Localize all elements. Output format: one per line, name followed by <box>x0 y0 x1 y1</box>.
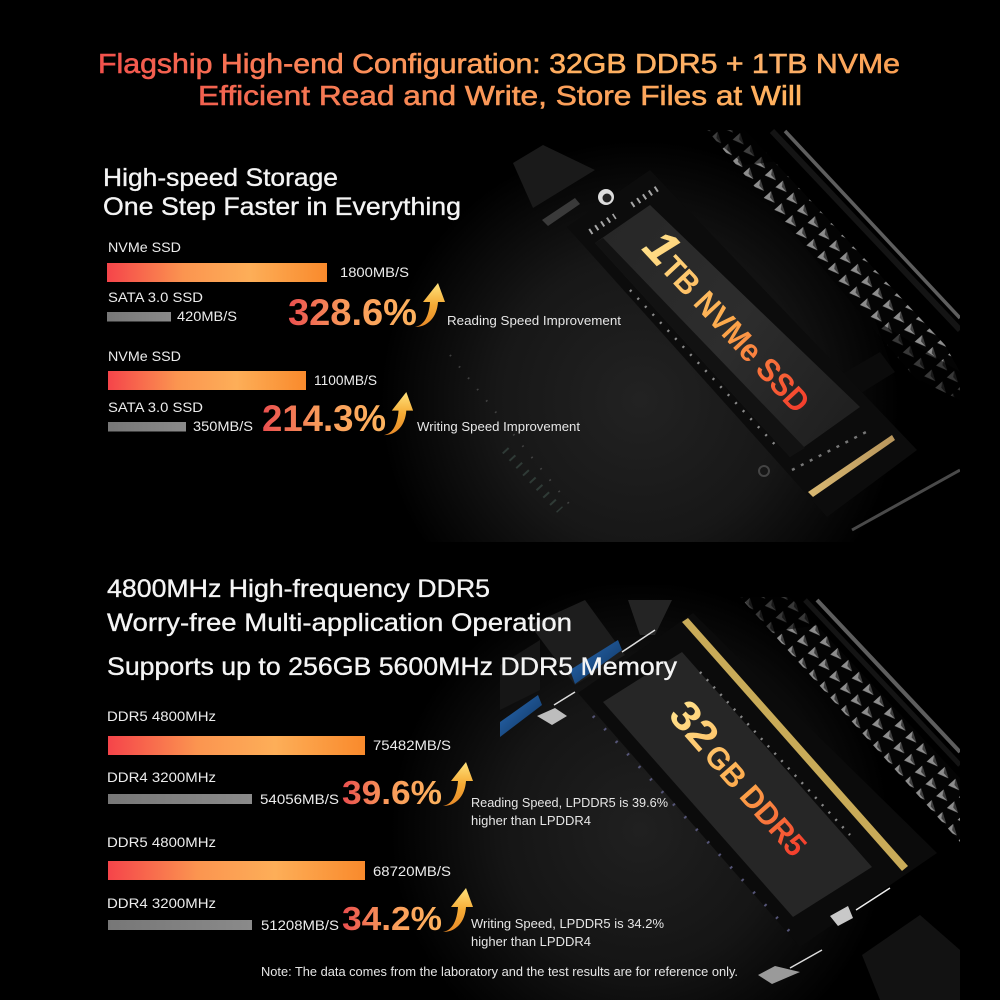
heading: DDR5 memory: 4800MHz High-frequency DDR5 <box>107 575 490 603</box>
photo: DDR5 memory module in chassis <box>434 597 960 1000</box>
heading: DDR5 memory: Worry-free Multi-application Operation <box>107 609 572 637</box>
heading: DDR5 memory <box>107 575 678 681</box>
chart: SSD reading speed: Reading Speed Improvement <box>447 314 622 328</box>
title: Flagship High-end Configuration: 32GB DDR5 + 1TB NVMe <box>98 48 900 79</box>
chart: SSD reading speed: NVMe SSD <box>108 239 181 255</box>
chart: DDR reading speed: Reading Speed, LPDDR5 is 39.6% <box>471 796 668 810</box>
chart: DDR writing speed <box>107 834 664 949</box>
chart: SSD reading speed <box>107 239 622 333</box>
heading: high-speed storage <box>103 164 461 221</box>
chart: DDR reading speed: 75482MB/S <box>373 737 451 753</box>
chart: SSD writing speed: 214.3% <box>262 398 386 439</box>
chart: SSD reading speed: SATA 3.0 SSD <box>108 289 203 305</box>
chart: SSD writing speed: 350MB/S <box>193 418 253 434</box>
heading: high-speed storage: One Step Faster in Everything <box>103 193 461 221</box>
chart: DDR reading speed: higher than LPDDR4 <box>471 814 591 828</box>
chart: DDR writing speed: DDR4 3200MHz <box>107 895 216 911</box>
RAM label: 32GB DDR5: 32 <box>660 691 729 759</box>
SSD label: 1TB NVMe SSD: TB NVMe SSD <box>654 249 817 420</box>
chart: SSD reading speed: 328.6% <box>288 292 417 333</box>
chart: DDR writing speed: 51208MB/S <box>261 917 339 933</box>
chart: DDR writing speed: Writing Speed, LPDDR5 is 34.2% <box>471 917 664 931</box>
RAM label: 32GB DDR5: GB DDR5 <box>697 738 814 863</box>
chart: DDR reading speed: 39.6% <box>342 774 442 811</box>
footnote: Note: The data comes from the laboratory and the test results are for reference only. <box>261 965 738 979</box>
chart: SSD writing speed <box>108 348 581 439</box>
chart: DDR writing speed: higher than LPDDR4 <box>471 935 591 949</box>
chart: SSD writing speed: 1100MB/S <box>314 372 377 388</box>
chart: SSD reading speed: 1800MB/S <box>340 264 409 280</box>
chart: DDR writing speed: 68720MB/S <box>373 863 451 879</box>
SSD label: 1TB NVMe SSD: 1 <box>633 220 690 276</box>
chart: DDR reading speed: 54056MB/S <box>260 791 339 807</box>
chart: DDR reading speed: DDR4 3200MHz <box>107 769 216 785</box>
title <box>98 48 900 111</box>
title: Efficient Read and Write, Store Files at Will <box>198 80 802 111</box>
chart: DDR reading speed: DDR5 4800MHz <box>107 708 216 724</box>
chart: SSD reading speed: 420MB/S <box>177 308 237 324</box>
photo: NVMe SSD installed in chassis <box>380 128 960 542</box>
chart: SSD writing speed: NVMe SSD <box>108 348 181 364</box>
chart: SSD writing speed: SATA 3.0 SSD <box>108 399 203 415</box>
heading: DDR5 memory: Supports up to 256GB 5600MHz DDR5 Memory <box>107 653 678 681</box>
chart: SSD writing speed: Writing Speed Improvement <box>417 420 581 434</box>
chart: DDR reading speed <box>107 708 668 828</box>
heading: high-speed storage: High-speed Storage <box>103 164 338 192</box>
chart: DDR writing speed: DDR5 4800MHz <box>107 834 216 850</box>
chart: DDR writing speed: 34.2% <box>342 900 442 937</box>
RAM label: 32GB DDR5 <box>660 691 821 864</box>
